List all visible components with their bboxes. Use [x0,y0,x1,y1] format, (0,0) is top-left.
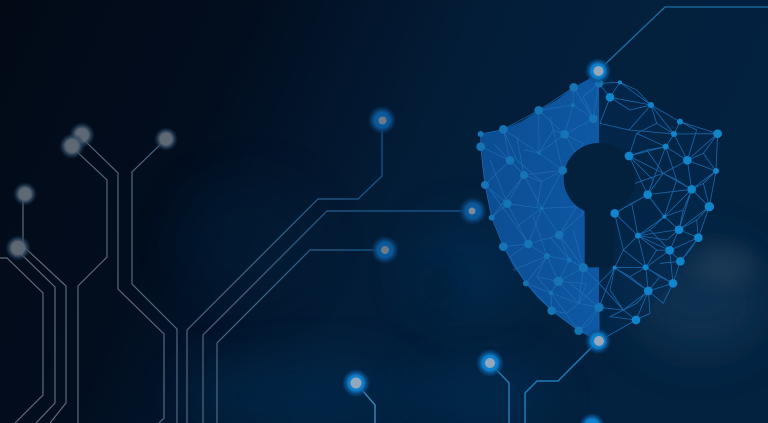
background clouds [180,180,768,423]
trace: left third [22,245,66,423]
shield right half tint [599,73,718,341]
node: lower centre [371,236,399,264]
trace: shield top [598,7,768,71]
shield [476,73,722,341]
node: left upper grey [13,182,37,206]
trace: top node long [132,141,177,423]
shield dots: right half [606,80,722,324]
node: bottom one [342,369,370,397]
node: bottom two [476,349,504,377]
node: upper middle [368,106,396,134]
node: centre [459,197,487,225]
trace: lower node one [356,383,375,423]
trace: upper middle node [187,120,382,423]
trace: lower centre node [217,250,385,423]
circuit traces [0,120,473,423]
shield left half fill [481,73,599,341]
trace: left second [20,253,55,423]
shield mesh: right half [599,82,718,341]
trace: double node second [84,140,164,423]
node: shield bottom [585,328,611,354]
trace: lower node two [490,363,509,423]
node: shield top [585,58,611,84]
trace: centre node [203,211,473,423]
trace: far left outer [0,258,43,423]
trace: double node first [74,149,107,423]
node: double grey [59,122,95,159]
node: top grey [154,127,178,151]
trace: vertical stub [22,196,24,246]
trace: shield bottom [525,341,598,423]
keyhole [564,143,635,267]
node: bottom edge [579,413,605,423]
shield mesh: left half [481,83,599,341]
node: left lower grey [5,235,31,261]
shield dots: left half [476,79,604,335]
